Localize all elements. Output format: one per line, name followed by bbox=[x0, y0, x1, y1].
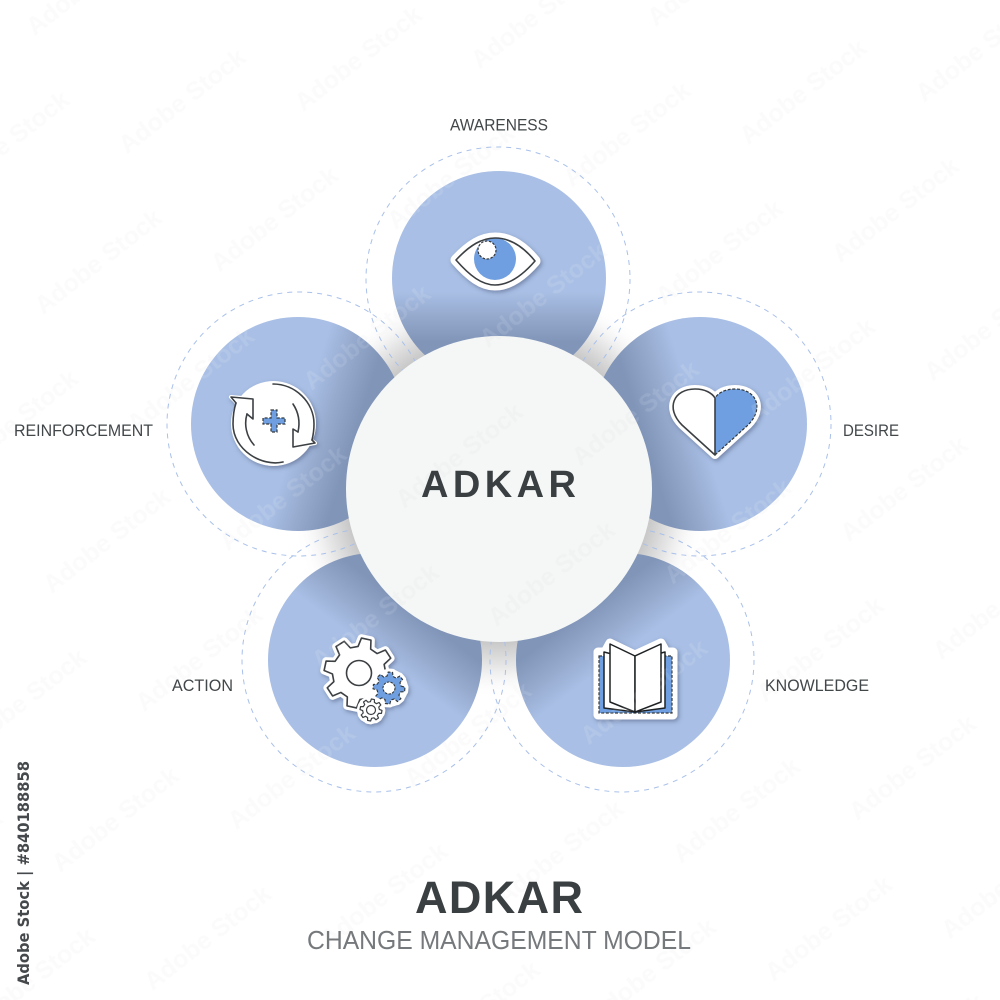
infographic bbox=[15, 119, 898, 985]
subtitle: CHANGE MANAGEMENT MODEL bbox=[307, 925, 691, 955]
icon: gears bbox=[318, 632, 408, 724]
center circle bbox=[346, 336, 652, 642]
center heading: ADKAR bbox=[421, 464, 576, 506]
label: knowledge: KNOWLEDGE bbox=[765, 677, 869, 695]
icon: open book bbox=[598, 643, 673, 715]
label: reinforcement: REINFORCEMENT bbox=[14, 422, 153, 440]
desire petal bbox=[593, 317, 807, 531]
label: desire: DESIRE bbox=[843, 422, 899, 440]
panel: action bbox=[172, 528, 506, 792]
icon: refresh cycle with plus bbox=[231, 381, 316, 466]
label: awareness: AWARENESS bbox=[450, 116, 548, 134]
icon: heart bbox=[673, 389, 757, 455]
awareness petal bbox=[392, 171, 606, 385]
panel: desire bbox=[567, 292, 899, 556]
title: ADKAR bbox=[415, 872, 583, 923]
label: action: ACTION bbox=[172, 677, 233, 695]
stock image id: Adobe Stock | #840188858 bbox=[14, 761, 34, 985]
reinforcement petal bbox=[191, 317, 405, 531]
panel: knowledge bbox=[490, 528, 869, 792]
knowledge petal bbox=[516, 553, 730, 767]
panel: reinforcement bbox=[14, 292, 431, 556]
panel: awareness bbox=[366, 116, 630, 411]
icon: eye bbox=[456, 238, 535, 285]
action petal bbox=[268, 553, 482, 767]
